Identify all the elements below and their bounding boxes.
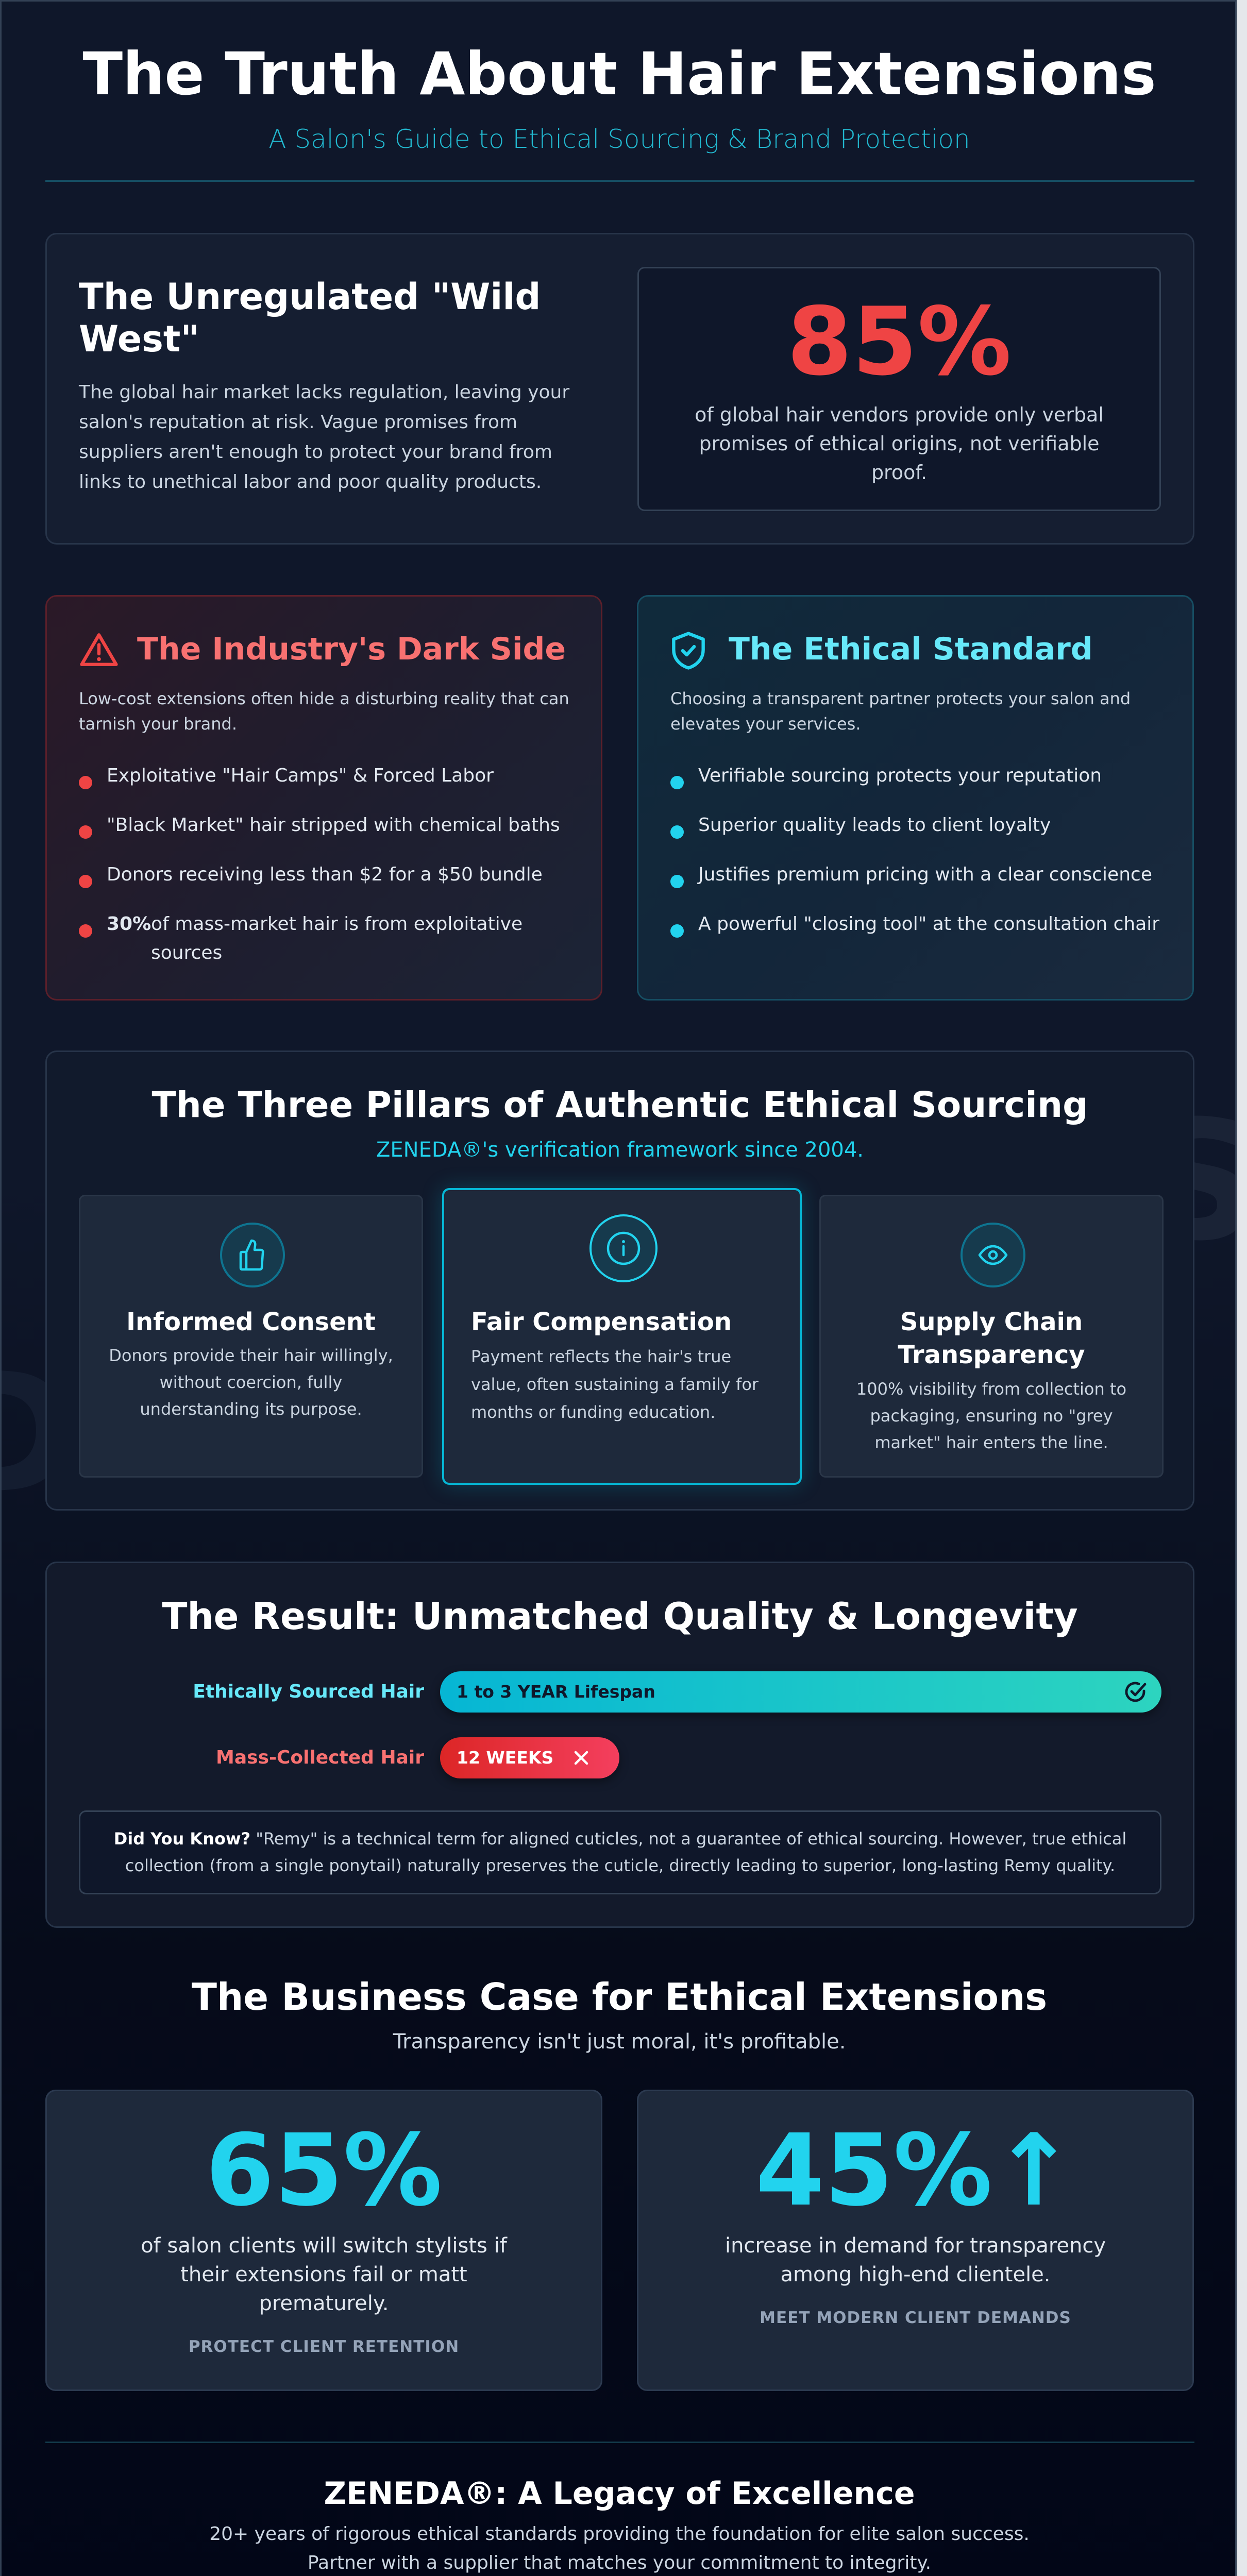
card text: 100% visibility from collection to [856, 1379, 1126, 1399]
list: dark side bullets [79, 765, 560, 963]
stat text: prematurely. [259, 2292, 389, 2315]
footer heading: ZENEDA®: A Legacy of Excellence [324, 2476, 915, 2512]
heading: business case: The Business Case for Ethical Extensions [192, 1975, 1047, 2019]
card: informed consent [79, 1195, 423, 1478]
stat number: 45%↑ [755, 2113, 1075, 2228]
stat number: 65% [206, 2113, 442, 2228]
stat text [725, 2234, 1106, 2286]
stat text: of salon clients will switch stylists if [141, 2234, 507, 2258]
footer text: 20+ years of rigorous ethical standards providing the foundation for elite salon success. [209, 2523, 1030, 2545]
card title: Fair Compensation [471, 1308, 732, 1336]
card title [898, 1308, 1085, 1369]
text: wild west body: suppliers aren't enough to protect your brand from [79, 442, 552, 463]
subtitle: A Salon's Guide to Ethical Sourcing & Brand Protection [268, 124, 970, 154]
icon: thumbs up [220, 1223, 285, 1287]
bar: 1 to 3 YEAR Lifespan [457, 1682, 655, 1702]
subheading: business case: Transparency isn't just moral, it's profitable. [393, 2030, 846, 2054]
stat text: increase in demand for transparency [725, 2234, 1106, 2258]
panel: result [45, 1562, 1194, 1928]
panel: ethical standard [637, 595, 1194, 1001]
stat caption: promises of ethical origins, not verifiable [699, 432, 1100, 455]
panel: dark side [45, 595, 602, 1001]
text: dark side intro [79, 689, 569, 734]
stat caption: proof. [871, 461, 927, 484]
bar [440, 1671, 1161, 1713]
icon: warning [80, 633, 118, 666]
list: dark side bullets: Exploitative "Hair Camps" & Forced Labor [107, 765, 494, 786]
stat text: their extensions fail or matt [180, 2263, 467, 2286]
card text: understanding its purpose. [140, 1399, 362, 1419]
card text: months or funding education. [471, 1402, 715, 1422]
list: dark side bullets: Donors receiving less than $2 for a $50 bundle [107, 864, 543, 885]
list: ethical bullets: Superior quality leads to client loyalty [698, 815, 1051, 836]
bar row: ethical [193, 1671, 1161, 1716]
bar [440, 1737, 619, 1778]
icon: check [1125, 1682, 1146, 1702]
stat caption [695, 403, 1104, 484]
list: dark side bullets: "Black Market" hair stripped with chemical baths [107, 815, 560, 836]
card title: Transparency [898, 1341, 1085, 1369]
list: ethical bullets: A powerful "closing tool" at the consultation chair [698, 913, 1159, 935]
card text: without coercion, fully [160, 1372, 342, 1392]
card text: value, often sustaining a family for [471, 1375, 759, 1394]
callout: did you know: Did You Know? "Remy" is a technical term for aligned cuticles, not a guarantee of ethical sourcing. However, true ethical [114, 1829, 1126, 1849]
card text [856, 1379, 1126, 1452]
card title: Supply Chain [900, 1308, 1083, 1336]
card text: Donors provide their hair willingly, [109, 1346, 393, 1365]
text: dark side intro: tarnish your brand. [79, 714, 237, 734]
text: ethical intro [670, 689, 1131, 734]
card text: Payment reflects the hair's true [471, 1347, 731, 1366]
text: wild west body: links to unethical labor and poor quality products. [79, 471, 542, 493]
footer text: Partner with a supplier that matches your commitment to integrity. [308, 2552, 931, 2573]
label: Ethically Sourced Hair [193, 1681, 424, 1702]
heading: wild west: The Unregulated "Wild West" [79, 276, 541, 360]
icon: eye [960, 1223, 1025, 1287]
callout: did you know: collection (from a single ponytail) naturally preserves the cuticle, directly leading to superior, long-lasting Remy quality. [125, 1856, 1115, 1875]
title: The Truth About Hair Extensions [82, 40, 1156, 108]
heading: ethical standard: The Ethical Standard [729, 631, 1093, 667]
card text [109, 1346, 393, 1419]
text: dark side intro: Low-cost extensions often hide a disturbing reality that can [79, 689, 569, 708]
bar row: mass [216, 1737, 619, 1782]
list: dark side bullets: sources [151, 942, 222, 963]
text: wild west body: The global hair market lacks regulation, leaving your [79, 382, 569, 403]
stat text: among high-end clientele. [780, 2263, 1051, 2286]
panel: wild west [45, 233, 1194, 545]
stat label: MEET MODERN CLIENT DEMANDS [760, 2309, 1071, 2327]
list: ethical bullets: Verifiable sourcing protects your reputation [698, 765, 1102, 786]
text: wild west body [78, 382, 570, 493]
card text: market" hair enters the line. [874, 1433, 1108, 1452]
heading: pillars: The Three Pillars of Authentic Ethical Sourcing [152, 1084, 1088, 1126]
icon: shield [672, 632, 705, 670]
text: ethical intro: Choosing a transparent partner protects your salon and [670, 689, 1131, 708]
stat card: 45% [637, 2090, 1194, 2391]
card title: Informed Consent [126, 1308, 376, 1336]
text: ethical intro: elevates your services. [670, 714, 861, 734]
bar: 12 WEEKS [457, 1748, 553, 1768]
card text [471, 1347, 759, 1422]
text: wild west body: salon's reputation at risk. Vague promises from [79, 412, 517, 433]
footer text [2, 2520, 1237, 2576]
list: ethical bullets [670, 765, 1159, 938]
list: ethical bullets: Justifies premium pricing with a clear conscience [698, 864, 1152, 885]
stat card: 65% [45, 2090, 602, 2391]
stat label: PROTECT CLIENT RETENTION [189, 2337, 459, 2356]
card: supply chain [819, 1195, 1164, 1478]
label: Mass-Collected Hair [216, 1747, 424, 1768]
icon: x [574, 1751, 588, 1765]
stat number: 85% [787, 287, 1012, 396]
stat box: 85% [637, 267, 1161, 511]
heading: result: The Result: Unmatched Quality & Longevity [162, 1595, 1078, 1638]
stat caption: of global hair vendors provide only verbal [695, 403, 1104, 426]
card text: packaging, ensuring no "grey [870, 1406, 1113, 1426]
stat text [141, 2234, 508, 2315]
panel: three pillars [45, 1050, 1194, 1511]
callout: did you know [79, 1810, 1161, 1894]
icon: info [589, 1214, 658, 1282]
list: dark side bullets: 30%of mass-market hair is from exploitative [107, 913, 523, 935]
heading: dark side: The Industry's Dark Side [137, 631, 566, 667]
subheading: pillars: ZENEDA®'s verification framework since 2004. [376, 1138, 864, 1162]
card: fair compensation [442, 1188, 802, 1485]
